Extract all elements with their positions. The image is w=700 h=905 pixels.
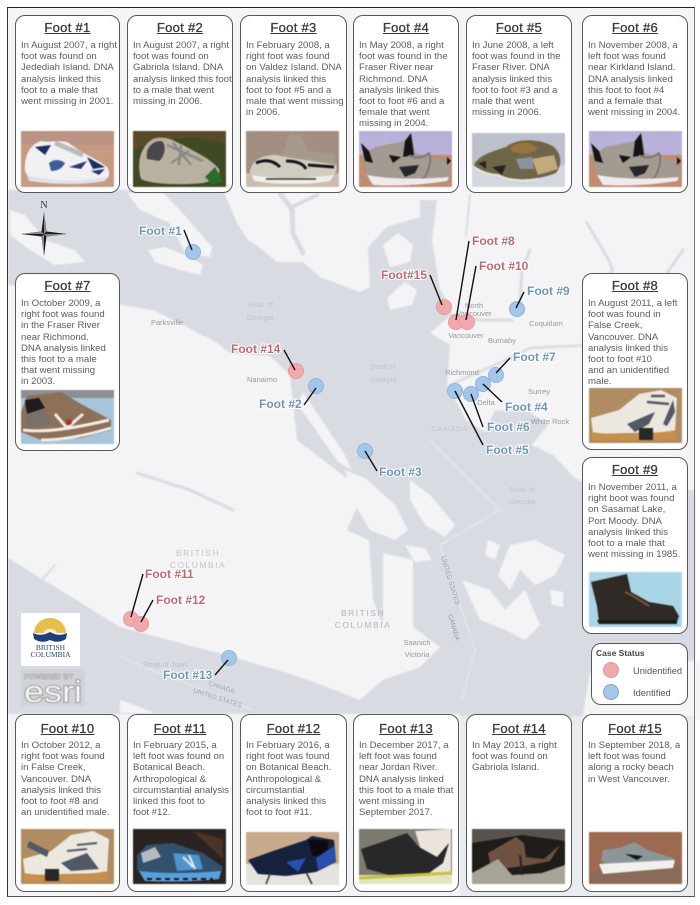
text block: near Jordan River. [359,762,437,773]
text block: on Valdez Island. DNA [246,62,342,73]
photo: white shoe with orange sole [588,387,683,444]
icon: north arrow compass: N [40,200,48,211]
text block: along a rocky beach [588,762,674,773]
map place labels: COLUMBIA [170,560,226,570]
text block: near Kirkland Island. [588,62,675,73]
heading: Foot #13 [379,721,433,736]
panel: Foot #12 [240,714,347,892]
text block: went missing in 2004. [588,107,680,118]
photo: weathered shoe in grass [132,130,227,188]
marker: Foot #10: Foot #10 [479,259,529,273]
map place labels: Georgia [370,375,397,384]
map place labels: White Rock [531,417,569,426]
text block: Richmond. DNA [359,74,428,85]
marker: Foot #14: Foot #14 [231,342,281,356]
text block: Arthropological & [133,774,206,785]
photo: brown shoe on blue background [20,389,115,444]
legend labels: Unidentified [633,666,682,676]
photo: black boot on blue background [588,572,682,628]
text block: and a female that [588,96,662,107]
panel: Foot #14 [466,714,572,892]
text block: missing in 2006. [472,107,541,118]
logo: powered by esri [22,670,84,706]
text block: went missing in 2001. [21,96,113,107]
map place labels: CANADA [207,680,236,695]
text block: linked this foot to [133,796,205,807]
legend title: Case Status [596,648,645,658]
text block: In February 2008, a [246,40,330,51]
text block: to a male that went [133,85,214,96]
logo: British Columbia: COLUMBIA [30,650,71,659]
text block: In October 2009, a [21,298,100,309]
text block: foot to foot #8 and [21,796,98,807]
map place labels: Burnaby [488,336,516,345]
marker: Foot #1 [139,224,200,260]
text block [588,740,680,785]
photo: white shoe with orange sole [20,828,115,885]
text block: Gabriola Island. DNA [133,62,223,73]
photo: muddy running shoe [245,130,340,188]
text block: left foot was found on [133,751,224,762]
text block: foot was found on [21,51,97,62]
map place labels: Vancouver [456,309,492,318]
map place labels: CANADA [431,424,469,433]
text block: In February 2016, a [246,740,330,751]
text block [472,40,561,118]
text block: left foot was found [588,751,666,762]
marker: Foot #1: Foot #1 [139,224,182,238]
text block: analysis linked this [21,74,101,85]
text block: male that went missing [246,96,344,107]
text block: analysis linked this [246,796,326,807]
text block: Vancouver. DNA [21,774,91,785]
text block: In February 2015, a [133,740,217,751]
map place labels: Georgia [247,313,274,322]
text block: foot to foot #3 and a [472,85,557,96]
text block [588,482,680,560]
marker: Foot #13: Foot #13 [163,668,213,682]
photo: brown shoe among rocks [471,828,566,885]
marker: Foot #12 [134,593,206,632]
text block: in West Vancouver. [588,774,670,785]
marker: Foot #5: Foot #5 [486,443,529,457]
text block: missing in 2004. [359,118,428,129]
panel: Foot #1 [15,15,120,193]
panel: Foot #6 [582,15,688,193]
text block: In May 2008, a right [359,40,444,51]
text block: foot to a male that [588,538,665,549]
text block: In August 2007, a right [133,40,229,51]
marker: Foot #9 [510,284,570,316]
text block: foot was found in [588,309,661,320]
text block: in 2003. [21,376,55,387]
text block: In September 2018, a [588,740,680,751]
panel: Foot #2 [127,15,233,193]
text block [472,740,557,773]
text block: this foot to foot #4 [588,85,664,96]
text block: False Creek, [588,320,642,331]
photo: black and blue shoe [245,831,340,886]
icon: north arrow compass [21,200,67,256]
text block: In December 2017, a [359,740,449,751]
text block: In August 2011, a left [588,298,677,309]
map place labels: BRITISH [176,548,220,558]
map place labels: Strait of [509,485,536,494]
text block [133,40,232,107]
text block [133,740,229,818]
text block: In August 2007, a right [21,40,117,51]
text block: foot to foot #6 and a [359,96,444,107]
marker: Foot #4 [476,376,548,414]
map place labels: Vancouver [448,331,484,340]
text block: this foot to a male [21,354,97,365]
heading: Foot #15 [608,721,662,736]
marker: Foot #14 [231,342,304,378]
marker: Foot #3 [358,444,422,479]
photo: olive-brown shoe [472,132,566,188]
text block: right boot was found [588,493,674,504]
text block: this foot to a male that [359,785,453,796]
marker: Foot #2 [259,378,324,411]
text block: Botanical Beach. [133,762,205,773]
text block [21,40,117,107]
text block: DNA analysis linked [359,774,444,785]
text block: right foot was found [21,751,105,762]
marker: Foot #12: Foot #12 [156,593,206,607]
heading: Foot #1 [44,20,91,35]
legend swatches [603,662,619,700]
text block: male that went [472,96,534,107]
text block: DNA analysis linked [21,343,106,354]
text block [21,298,106,387]
photo: grey sneaker on brown [588,831,683,885]
map place labels: UNITED STATES [192,687,243,710]
marker: Foot #11: Foot #11 [145,567,194,581]
photo: black shoe with yellow ruler [358,828,453,884]
text block: September 2017. [359,807,433,818]
marker: Foot #2: Foot #2 [259,397,302,411]
text block: went missing in 1985. [588,549,680,560]
text block: analysis linked this [588,343,668,354]
legend: case status [591,643,688,705]
text block: that went missing [21,365,95,376]
text block [21,740,110,818]
marker: Foot #6 [464,386,530,434]
text block: foot to a male that [21,85,98,96]
text block: In May 2013, a right [472,740,557,751]
heading: Foot #6 [612,20,658,35]
text block: right foot was found [21,309,105,320]
marker: Foot #7 [488,350,556,382]
text block: and an unidentified [588,365,669,376]
heading: Foot #14 [492,721,546,736]
text block: went missing in [359,796,425,807]
heading: Foot #10 [41,721,94,736]
map place labels: Parksville [151,318,183,327]
text block: left foot was found [588,51,666,62]
photo: worn shoe on lavender background [358,130,453,188]
text block [359,40,448,129]
text block: right foot was found [246,751,330,762]
text block: circumstantial analysis [133,785,229,796]
map place labels: Strait of Juan [143,660,187,669]
photo: blue shoe on dark background [132,828,227,885]
text block: foot #12. [133,807,170,818]
text block: left foot was found [359,751,437,762]
text block: analysis linked this [21,785,101,796]
text block: foot was found in the [359,51,448,62]
text block: Jedediah Island. DNA [21,62,114,73]
text block: in the Fraser River [21,320,100,331]
text block: analysis linked this [472,74,552,85]
panel: Foot #13 [353,714,459,892]
marker: Foot #5 [448,384,529,457]
text block: in 2006. [246,107,280,118]
heading: Foot #3 [270,20,317,35]
map place labels: Strait of [370,362,397,371]
map place labels: Saanich [403,638,431,647]
map place labels: Richmond [445,368,479,377]
heading: Foot #4 [383,20,429,35]
marker: Foot #7: Foot #7 [513,350,556,364]
map place labels: Surrey [528,387,550,396]
text block: In June 2008, a left [472,40,554,51]
text block: analysis linked this foot [133,74,232,85]
text block: foot to foot #5 and a [246,85,331,96]
map place labels: Nanaimo [247,375,277,384]
marker: Foot #4: Foot #4 [505,400,548,414]
text block: circumstantial [246,785,305,796]
marker: Foot #10 [460,259,529,330]
text block: DNA analysis linked [588,74,673,85]
text block: In November 2008, a [588,40,678,51]
text block: Vancouver. DNA [588,332,658,343]
map place labels: Strait of [247,300,274,309]
panel: Foot #9 [582,457,688,634]
text block [246,40,344,118]
marker: Foot #9: Foot #9 [527,284,570,298]
panel: Foot #7 [15,273,120,451]
map place labels: CANADA [446,614,461,642]
map place labels: Victoria [405,650,430,659]
heading: Foot #8 [612,278,658,293]
map place labels: Georgia [509,497,536,506]
heading: Foot #5 [496,20,542,35]
panel: Foot #8 [582,273,688,450]
text block: In October 2012, a [21,740,100,751]
map place labels: North [465,301,483,310]
text block: foot was found in the [472,51,561,62]
text block [246,740,331,818]
text block: Anthropological & [246,774,321,785]
logo: powered by esri: POWERED BY [24,672,73,681]
text block: Gabriola Island. [472,762,539,773]
text block: in False Creek, [21,762,86,773]
panel: Foot #5 [466,15,572,193]
text block: missing in 2006. [133,96,202,107]
marker: Foot #6: Foot #6 [487,420,530,434]
text block: an unidentified male. [21,807,110,818]
photo: worn shoe on lavender background [588,130,683,188]
heading: Foot #9 [612,462,658,477]
heading: Foot #11 [154,721,206,736]
text block: female that went [359,107,429,118]
logo: British Columbia: BRITISH [36,643,66,652]
text block: on Sasamat Lake, [588,504,665,515]
legend labels [633,666,682,698]
text block: Port Moody. DNA [588,516,662,527]
text block: Fraser River near [359,62,434,73]
photo: white and navy shoe [20,130,115,188]
text block: near Richmond. [21,332,89,343]
text block: foot was found on [472,751,548,762]
text block [588,298,678,387]
marker: Foot #15 [381,268,452,314]
marker: Foot #8 [448,234,515,330]
text block: male. [588,376,611,387]
map place labels: Delta [477,398,496,407]
panel: Foot #11 [127,714,233,892]
text block: In November 2011, a [588,482,677,493]
text block: analysis linked this [588,527,668,538]
text block: analysis linked this [246,74,326,85]
marker: Foot #3: Foot #3 [379,465,422,479]
text block [588,40,680,118]
marker: Foot #8: Foot #8 [472,234,515,248]
map place labels: Coquitlam [529,319,563,328]
text block: Fraser River. DNA [472,62,550,73]
heading: Foot #2 [157,20,203,35]
text block: foot to foot #11. [246,807,312,818]
map place labels: BRITISH [341,608,385,618]
marker: Foot #11 [124,567,194,626]
map place labels: COLUMBIA [335,620,391,630]
legend labels: Identified [633,688,671,698]
marker: Foot #13 [163,650,236,682]
panel: Foot #4 [353,15,459,193]
text block [359,740,454,818]
marker: Foot #15: Foot#15 [381,268,427,282]
panel: Foot #3 [240,15,347,193]
heading: Foot #12 [267,721,320,736]
text block: foot was found on [133,51,209,62]
text block: foot to foot #10 [588,354,652,365]
text block: analysis linked this [359,85,439,96]
panel: Foot #10 [15,714,120,892]
text block: on Botanical Beach. [246,762,331,773]
heading: Foot #7 [44,278,91,293]
map place labels: UNITED STATES [439,556,461,606]
logo: British Columbia [21,613,80,666]
text block: right foot was found [246,51,330,62]
panel: Foot #15 [582,714,688,892]
